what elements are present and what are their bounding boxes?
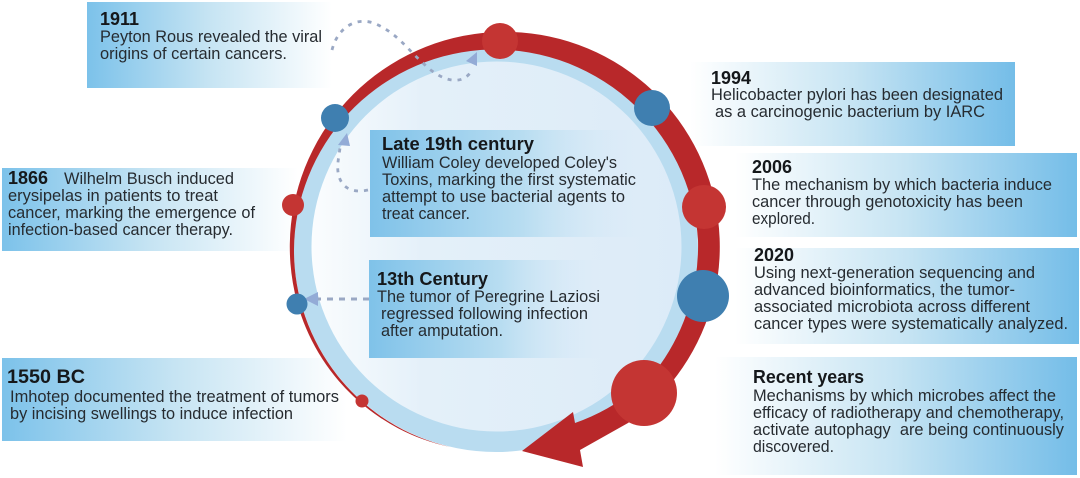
panel: 1866: erysipelas in patients to treat [8, 187, 218, 205]
marker: 1550 BC [356, 394, 368, 408]
marker: 13th century [286, 294, 308, 314]
panel: 1911: Peyton Rous revealed the viral [100, 28, 322, 46]
panel: 1911 [87, 2, 332, 88]
panel: 1911: 1911 [100, 9, 139, 29]
panel: late 19th century: treat cancer. [382, 205, 470, 223]
panel: recent years: discovered. [753, 438, 834, 456]
panel: 2020: advanced bioinformatics, the tumor- [754, 281, 1015, 299]
panel: 1550 BC: 1550 BC [7, 366, 85, 388]
light blue ring [294, 48, 698, 452]
panel: 13th century [369, 260, 609, 358]
panel: 1866: infection-based cancer therapy. [8, 221, 233, 239]
arrow: dotted link from 13th century panel [304, 292, 369, 306]
marker: 1911 [482, 23, 518, 59]
marker: 1866 [282, 194, 304, 216]
panel: 2006: cancer through genotoxicity has been [752, 193, 1023, 211]
panel: 1550 BC [2, 358, 347, 441]
panel: 13th century: after amputation. [381, 322, 503, 340]
panel: 13th century: 13th Century [377, 269, 488, 289]
marker: recent years [611, 360, 677, 426]
panel: 1866: Wilhelm Busch induced [64, 170, 234, 188]
panel: 13th century: The tumor of Peregrine Laziosi [377, 288, 600, 306]
panel: late 19th century: William Coley developed Coley's [382, 154, 617, 172]
panel: 2006 [735, 153, 1077, 237]
panel: 1994: as a carcinogenic bacterium by IARC [715, 103, 985, 121]
panel: recent years: Recent years [753, 367, 864, 387]
panel: 1866: 1866 [8, 168, 48, 188]
panel: 1866: cancer, marking the emergence of [8, 204, 255, 222]
panel: recent years: Mechanisms by which microbes affect the [753, 387, 1056, 405]
arrow: dotted loop from 1911 panel [332, 21, 477, 80]
arrow: dotted link from late 19th century panel [338, 133, 368, 191]
panel: 1994: Helicobacter pylori has been designated [711, 86, 1003, 104]
panel: 1994 [690, 62, 1015, 146]
panel: 2006: explored. [752, 210, 815, 228]
panel: 1994: 1994 [711, 68, 751, 88]
panel: 2020: Using next-generation sequencing and [754, 264, 1035, 282]
panel: 1550 BC: by incising swellings to induce infection [10, 405, 293, 423]
panel: late 19th century [370, 130, 648, 237]
panel: 2006: The mechanism by which bacteria induce [752, 176, 1052, 194]
panel: 1550 BC: Imhotep documented the treatment of tumors [10, 388, 339, 406]
panel: 2020: associated microbiota across different [754, 298, 1030, 316]
panel: 2020: 2020 [754, 245, 794, 265]
marker: 1994 [634, 90, 670, 126]
panel: 2020 [735, 245, 1079, 344]
marker: late 19th century [321, 104, 349, 132]
panel: 1911: origins of certain cancers. [100, 45, 287, 63]
panel: late 19th century: Toxins, marking the first systematic [382, 171, 636, 189]
timeline markers [282, 23, 729, 426]
panel: 13th century: regressed following infection [381, 305, 588, 323]
marker: 2020 [677, 270, 729, 322]
panel: 2006: 2006 [752, 157, 792, 177]
panel: late 19th century: attempt to use bacterial agents to [382, 188, 625, 206]
panel: recent years: efficacy of radiotherapy and chemotherapy, [753, 404, 1064, 422]
panel: 1866 [2, 168, 298, 251]
panel: recent years: activate autophagy are being continuously [753, 421, 1065, 439]
panel: 2020: cancer types were systematically analyzed. [754, 315, 1068, 333]
pale inner disc [312, 62, 682, 432]
panel: recent years [715, 357, 1077, 475]
tapered red arc with arrowhead [290, 32, 720, 467]
panel: late 19th century: Late 19th century [382, 134, 534, 154]
marker: 2006 [682, 185, 726, 229]
